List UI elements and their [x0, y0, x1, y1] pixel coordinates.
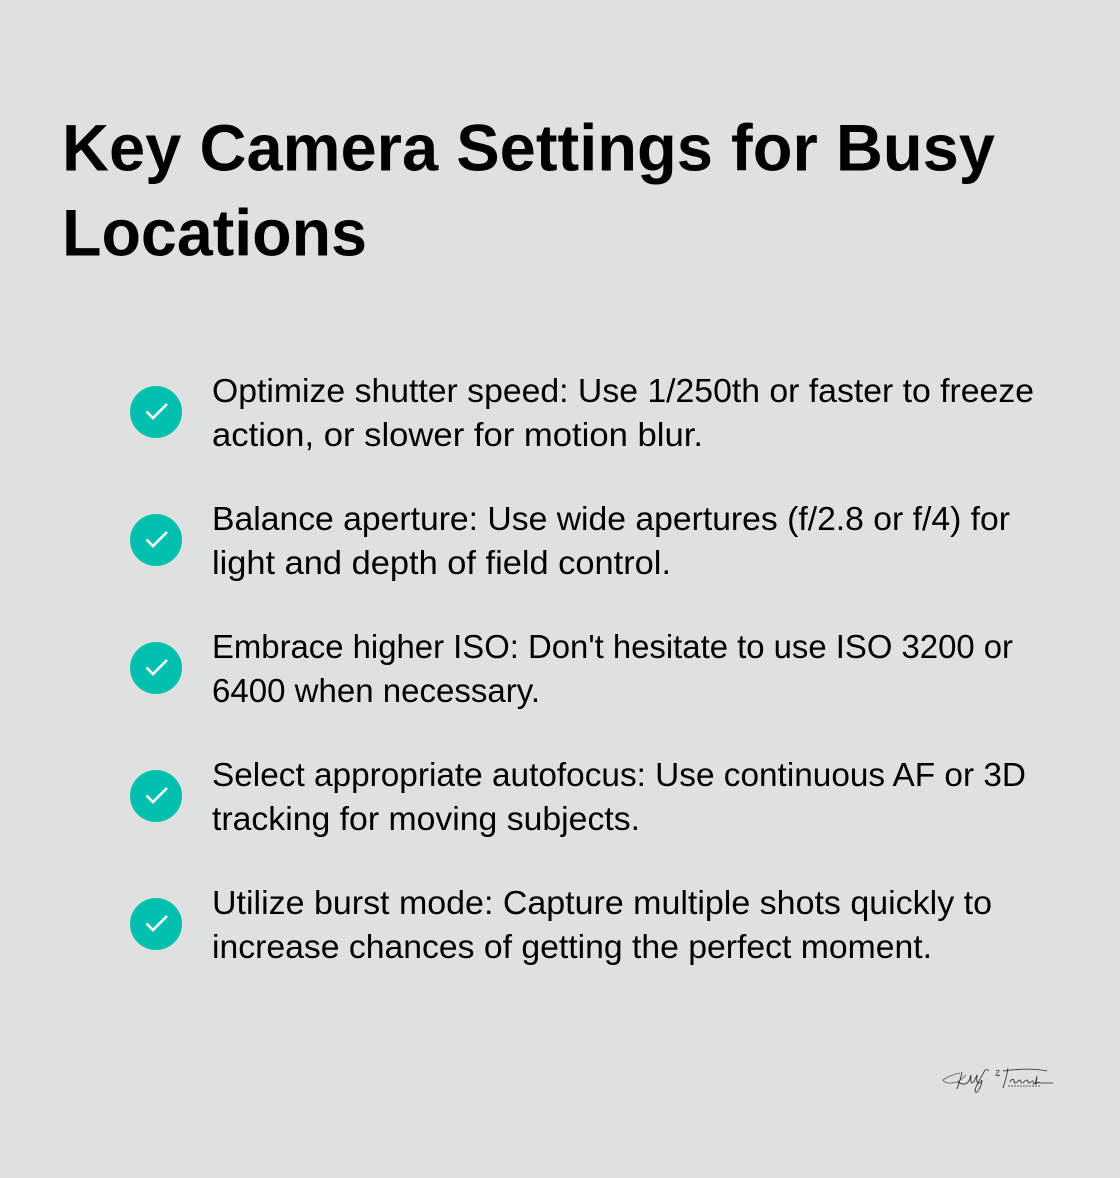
icon: check mark [130, 642, 182, 694]
title: Key Camera Settings for Busy [62, 110, 995, 184]
text: shutter speed [212, 372, 1034, 453]
icon: check mark [130, 514, 182, 566]
logo: signature [943, 1068, 1053, 1092]
text: autofocus [212, 756, 1026, 837]
text: aperture [212, 500, 1010, 581]
list item: ISO [130, 628, 1013, 709]
text: ISO: 6400 when necessary. [212, 672, 540, 709]
text: aperture: Balance aperture: Use wide apertures (f/2.8 or f/4) for [212, 500, 1010, 537]
title: Locations [62, 196, 367, 270]
text: burst mode [212, 884, 992, 965]
text: autofocus: tracking for moving subjects. [212, 800, 640, 837]
text: burst mode: Utilize burst mode: Capture multiple shots quickly to [212, 884, 992, 921]
text: shutter speed: action, or slower for motion blur. [212, 416, 703, 453]
text: autofocus: Select appropriate autofocus: Use continuous AF or 3D [212, 756, 1026, 793]
text: ISO: Embrace higher ISO: Don't hesitate to use ISO 3200 or [212, 628, 1013, 665]
title [62, 110, 995, 270]
icon: check mark [130, 898, 182, 950]
icon: check mark [130, 386, 182, 438]
text: ISO [212, 628, 1013, 709]
text: burst mode: increase chances of getting the perfect moment. [212, 928, 932, 965]
list item: aperture [130, 500, 1010, 581]
checklist [130, 372, 1034, 965]
list item: autofocus [130, 756, 1026, 837]
text: shutter speed: Optimize shutter speed: Use 1/250th or faster to freeze [212, 372, 1034, 409]
list item: burst mode [130, 884, 992, 965]
text: aperture: light and depth of field control. [212, 544, 671, 581]
list item: shutter speed [130, 372, 1034, 453]
icon: check mark [130, 770, 182, 822]
